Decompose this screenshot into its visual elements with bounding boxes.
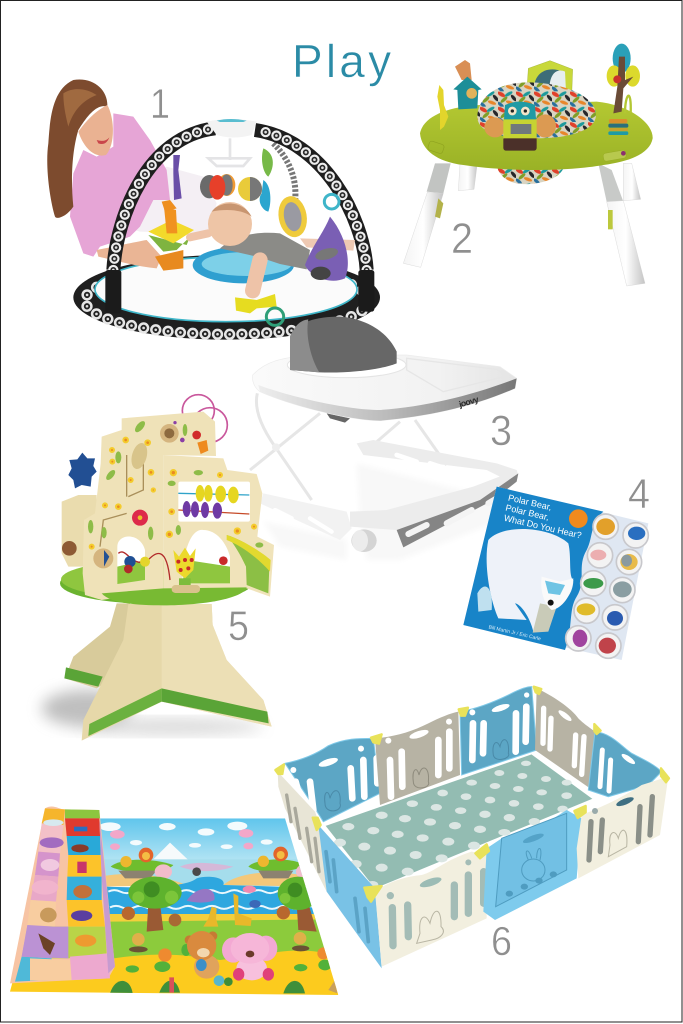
back arch bbox=[273, 143, 295, 202]
floor bbox=[325, 753, 593, 889]
stand bbox=[64, 603, 272, 741]
title: Play bbox=[292, 35, 394, 87]
fabric seat bbox=[477, 82, 596, 138]
number 4: 4 bbox=[628, 470, 650, 517]
seat bbox=[290, 317, 397, 373]
walker frame legs bbox=[250, 393, 447, 500]
seat underside bbox=[497, 168, 563, 184]
monkeys and small animals bbox=[122, 886, 329, 962]
product 6: baby playpen bbox=[275, 687, 669, 968]
left tree bbox=[128, 877, 182, 932]
baby bbox=[190, 202, 355, 291]
purple dots and wire beads bbox=[118, 421, 228, 580]
yellow pinwheel toy bbox=[437, 85, 448, 130]
tray bbox=[252, 352, 517, 421]
front right cream panel bbox=[577, 777, 668, 878]
printed flowers bbox=[90, 438, 256, 549]
product 2: activity table bbox=[403, 44, 653, 286]
tulip toy bbox=[172, 548, 200, 593]
bushes bbox=[126, 944, 332, 973]
gate blue bbox=[483, 810, 582, 920]
seat arch toy bbox=[527, 61, 573, 97]
giraffe block toy bbox=[148, 200, 194, 271]
product: play mat bbox=[0, 806, 350, 1000]
gear bbox=[68, 453, 97, 488]
printed leaves bbox=[88, 419, 263, 548]
table controls bbox=[427, 141, 627, 162]
floor shadow bbox=[42, 690, 263, 734]
abacus bbox=[178, 485, 249, 519]
distant water and sand bbox=[104, 859, 306, 886]
melons bbox=[110, 977, 337, 993]
river bbox=[107, 877, 333, 917]
cover title: Polar Bear, bbox=[507, 493, 553, 512]
clouds bbox=[99, 822, 273, 849]
back legs bbox=[458, 163, 641, 201]
balls bbox=[214, 975, 233, 986]
author line: Bill Martin Jr / Eric Carle bbox=[488, 624, 542, 642]
left side wall cream bbox=[278, 772, 327, 892]
table top bbox=[420, 102, 653, 170]
right tree bbox=[278, 877, 319, 932]
back panel 1 blue bbox=[285, 738, 380, 822]
brand: joovy bbox=[457, 394, 480, 410]
wheel bbox=[351, 529, 377, 552]
polar bear bbox=[477, 529, 573, 633]
yellow teether toy bbox=[235, 294, 284, 325]
front left panel bbox=[83, 412, 216, 600]
lions and tigers bbox=[120, 847, 312, 879]
giraffes bbox=[203, 893, 252, 927]
islands bbox=[111, 859, 305, 878]
back left panel bbox=[62, 495, 97, 567]
number 5: 5 bbox=[228, 602, 249, 649]
platform bbox=[60, 560, 252, 604]
balloons bbox=[110, 829, 253, 850]
number 6: 6 bbox=[491, 918, 512, 964]
product 5: wooden activity tree bbox=[42, 395, 274, 741]
bear bbox=[185, 931, 219, 979]
number 3: 3 bbox=[490, 407, 512, 455]
cover title: What Do You Hear? bbox=[503, 513, 583, 540]
whale bbox=[187, 889, 215, 903]
yellow corner connectors bbox=[275, 687, 669, 902]
front right leg bbox=[598, 163, 645, 286]
hanging balls bbox=[200, 174, 262, 201]
birdhouse with squirrel bbox=[453, 60, 482, 109]
rear base bbox=[357, 440, 517, 480]
front left leg bbox=[403, 163, 451, 267]
front bar bbox=[350, 470, 518, 547]
mobile bar bbox=[208, 138, 250, 166]
cover title: Polar Bear, bbox=[505, 503, 550, 522]
walker reflection bbox=[263, 463, 500, 560]
blue cover bbox=[463, 487, 603, 650]
mother bbox=[47, 79, 217, 268]
mat scene bbox=[0, 817, 350, 1000]
ground bbox=[110, 914, 329, 964]
left base bbox=[260, 493, 352, 540]
front left wall blue bbox=[318, 825, 382, 968]
arch top connector bbox=[207, 119, 257, 137]
teal ring bbox=[324, 194, 339, 209]
elephant bbox=[222, 933, 277, 981]
front platform edge bbox=[102, 587, 247, 605]
elephant toy bbox=[305, 217, 348, 281]
arches bbox=[113, 128, 367, 270]
cover title bbox=[503, 493, 583, 540]
mirror ring bbox=[275, 194, 310, 239]
green and blue monkeys bbox=[260, 148, 273, 212]
wooden discs bbox=[62, 424, 179, 568]
tree toy bbox=[607, 44, 640, 135]
rolled mat end bbox=[10, 806, 115, 983]
back panel 3 blue bbox=[460, 687, 537, 775]
roll illustrations bbox=[32, 819, 96, 955]
number 1: 1 bbox=[150, 80, 170, 127]
owl toy bbox=[484, 102, 556, 151]
product 3: baby walker bbox=[250, 317, 518, 560]
arch feet bbox=[105, 270, 374, 313]
sound buttons bbox=[566, 514, 648, 658]
front cream panel bbox=[375, 852, 487, 967]
gym mat bbox=[73, 255, 380, 340]
number 2: 2 bbox=[451, 215, 473, 263]
wire loops bbox=[182, 395, 227, 442]
right panel bbox=[163, 455, 274, 597]
yellow foreground bbox=[10, 950, 338, 995]
button animals bbox=[573, 518, 645, 654]
back panel 2 beige bbox=[375, 712, 460, 805]
back panel 5 blue bbox=[588, 732, 662, 797]
back panel 4 beige bbox=[535, 688, 595, 788]
product 4: polar bear sound book bbox=[463, 487, 648, 660]
book board bbox=[463, 487, 648, 660]
purple hanging toy bbox=[173, 155, 182, 200]
orange sticker bbox=[569, 509, 588, 528]
product 1: activity gym with mother and baby bbox=[47, 79, 380, 340]
red flower bbox=[132, 510, 148, 526]
mountain bbox=[154, 842, 188, 860]
underside mechanism bbox=[327, 413, 350, 423]
